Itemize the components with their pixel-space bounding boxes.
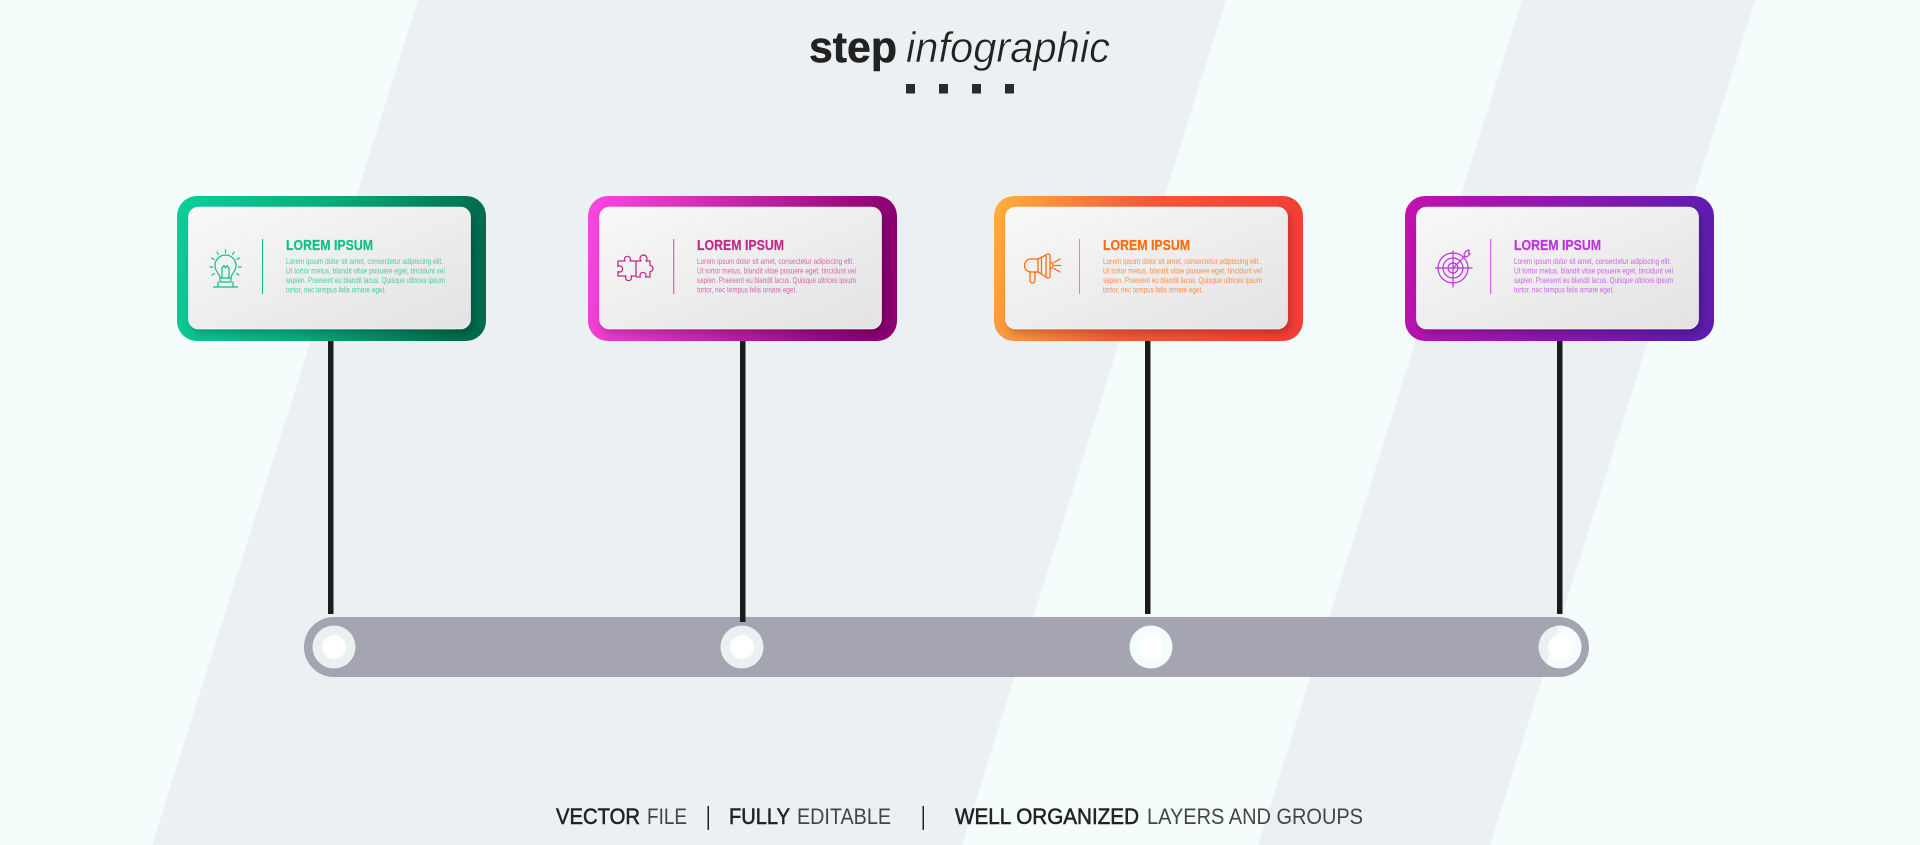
panel: step 3 (994, 196, 1303, 341)
body text: sapien. Praesent eu blandit lacus. Quisque ultrices ipsum (1514, 276, 1673, 285)
icon: target (1436, 250, 1472, 287)
body text: Ut tortor metus, blandit vitae posuere eget, tincidunt vel (1514, 266, 1673, 276)
body text: Lorem ipsum dolor sit amet, consectetur adipiscing elit. (697, 257, 854, 266)
footer caption: LAYERS AND GROUPS (1147, 804, 1363, 829)
timeline bar with circular cut-outs (304, 617, 1589, 677)
heading: LOREM IPSUM (697, 238, 784, 254)
body text: tortor, nec tempus felis ornare eget. (697, 285, 797, 294)
divider (1079, 239, 1080, 294)
connector stem 4 (1557, 340, 1562, 614)
divider (673, 239, 674, 294)
body text: sapien. Praesent eu blandit lacus. Quisque ultrices ipsum (1103, 276, 1262, 285)
heading: LOREM IPSUM (286, 238, 373, 254)
title (809, 23, 1110, 72)
body text: Ut tortor metus, blandit vitae posuere eget, tincidunt vel (286, 266, 445, 276)
footer caption: WELL ORGANIZED (955, 804, 1139, 829)
connector stem 2 (740, 340, 746, 622)
panel: step 4 (1405, 196, 1714, 341)
footer caption (556, 804, 1363, 830)
body text (1103, 257, 1262, 294)
body text: Lorem ipsum dolor sit amet, consectetur adipiscing elit. (286, 257, 443, 266)
body text (1514, 257, 1673, 294)
footer caption: EDITABLE (797, 804, 891, 829)
body text: Lorem ipsum dolor sit amet, consectetur adipiscing elit. (1103, 257, 1260, 266)
icon: light bulb (210, 250, 241, 287)
connector stem 3 (1145, 340, 1150, 614)
body text: Lorem ipsum dolor sit amet, consectetur adipiscing elit. (1514, 257, 1671, 266)
icon: megaphone (1024, 254, 1061, 283)
connector stem 1 (328, 340, 334, 614)
body text: sapien. Praesent eu blandit lacus. Quisque ultrices ipsum (286, 276, 445, 285)
body text: Ut tortor metus, blandit vitae posuere eget, tincidunt vel (697, 266, 856, 276)
divider (1490, 239, 1491, 294)
heading: LOREM IPSUM (1103, 238, 1190, 254)
body text: tortor, nec tempus felis ornare eget. (1514, 285, 1614, 294)
body text (697, 257, 856, 294)
footer caption: FILE (647, 804, 687, 829)
title: step (809, 23, 897, 72)
panel: step 2 (588, 196, 897, 341)
title: infographic (906, 24, 1110, 72)
body text: tortor, nec tempus felis ornare eget. (286, 285, 386, 294)
title dots (906, 84, 1014, 94)
heading: LOREM IPSUM (1514, 238, 1601, 254)
divider (262, 239, 263, 294)
panel: step 1 (177, 196, 486, 341)
body text: Ut tortor metus, blandit vitae posuere eget, tincidunt vel (1103, 266, 1262, 276)
footer caption: FULLY (729, 804, 790, 829)
body text: sapien. Praesent eu blandit lacus. Quisque ultrices ipsum (697, 276, 856, 285)
footer caption: VECTOR (556, 804, 640, 829)
body text: tortor, nec tempus felis ornare eget. (1103, 285, 1203, 294)
body text (286, 257, 445, 294)
icon: puzzle (618, 255, 653, 281)
